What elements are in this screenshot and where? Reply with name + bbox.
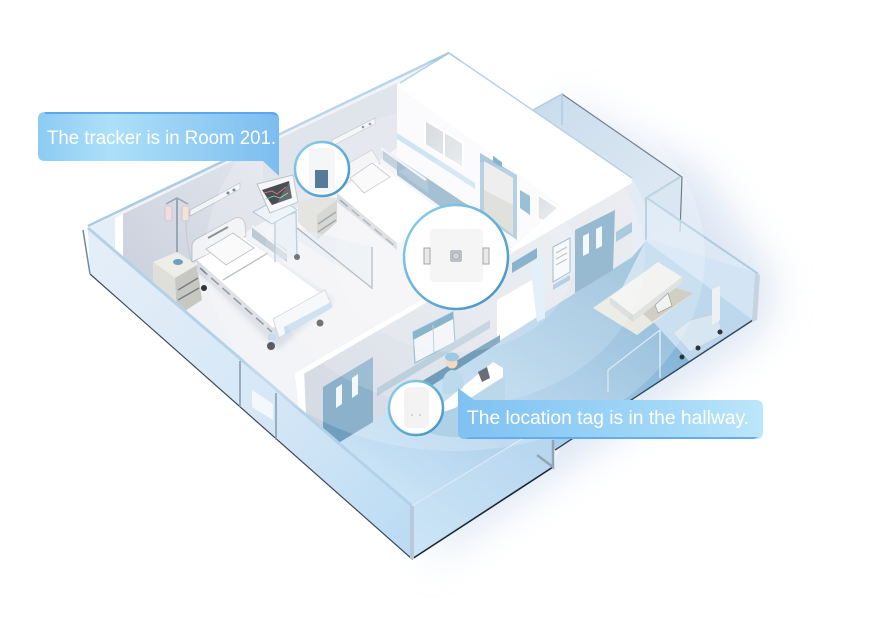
double door, left xyxy=(323,357,373,452)
right wing glass room xyxy=(555,198,760,450)
main floor xyxy=(88,53,632,559)
soft blue shadow around the building xyxy=(425,100,775,565)
hallway blue floor xyxy=(290,240,757,559)
device circle: main gateway xyxy=(404,205,508,309)
medical trolley xyxy=(673,286,722,360)
device circle: location tag xyxy=(389,381,443,435)
far wall with windows, white room xyxy=(397,85,560,250)
room doorway xyxy=(480,153,517,240)
bedside cabinet, right xyxy=(298,196,337,240)
front glass walls xyxy=(83,228,553,559)
callout: tracker in Room 201: The tracker is in Room 201. xyxy=(47,128,276,149)
annex room, upper right glass xyxy=(533,94,682,240)
blue skirting xyxy=(130,288,152,308)
back glass top edge xyxy=(88,53,449,226)
notice board xyxy=(553,238,570,282)
device circle: tracker in room xyxy=(295,142,349,196)
callout: location tag in hallway: The location tag is in the hallway. xyxy=(467,408,749,429)
patient monitor on cart xyxy=(253,175,300,262)
door sign xyxy=(493,153,502,167)
back wall, left room xyxy=(123,146,263,302)
reception desk xyxy=(425,362,505,437)
manager desk on rug xyxy=(593,262,693,335)
wall rail, left room xyxy=(190,183,240,216)
wall opening xyxy=(497,277,537,342)
hospital bed, left xyxy=(192,218,335,350)
IV pole xyxy=(165,198,192,262)
double door, right xyxy=(575,210,615,293)
callout: location tag in hallway xyxy=(458,388,763,439)
hospital bed, right xyxy=(335,148,460,250)
reception window xyxy=(413,312,455,363)
left glass end of the room xyxy=(88,214,152,312)
wall rail, right room xyxy=(332,118,375,146)
cross sign xyxy=(520,190,530,215)
nurse xyxy=(442,352,464,394)
building top, white ledge xyxy=(397,53,632,250)
back wall, right room xyxy=(263,83,397,222)
small window xyxy=(538,195,557,224)
front wall of the building xyxy=(295,178,632,466)
white corner post xyxy=(295,369,308,466)
glass partition between rooms xyxy=(297,228,373,289)
callout: tracker in Room 201 xyxy=(38,112,279,176)
bedside cabinet, left xyxy=(153,252,202,316)
blue wall sign xyxy=(512,248,537,273)
signal rings from main device xyxy=(205,61,705,451)
window xyxy=(425,120,463,168)
